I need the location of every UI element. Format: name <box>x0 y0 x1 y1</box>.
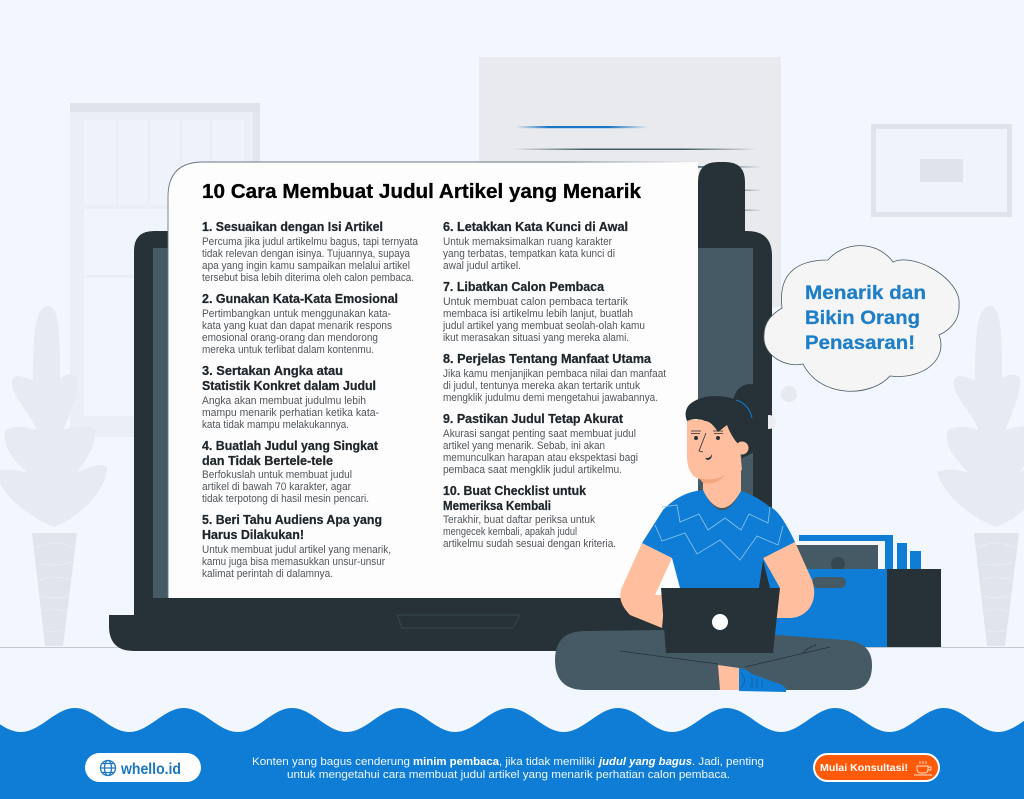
tip 9 <box>443 412 638 476</box>
tip 10: Memeriksa Kembali <box>443 499 551 513</box>
thought bubble dots <box>762 386 797 429</box>
ground line <box>0 647 1024 648</box>
tip 7: Untuk membuat calon pembaca tertarik <box>443 296 629 308</box>
tip 2 <box>202 292 398 356</box>
tip 6: Untuk memaksimalkan ruang karakter <box>443 236 612 248</box>
tip 7: 7. Libatkan Calon Pembaca <box>443 280 605 294</box>
tip 3 <box>202 364 379 431</box>
tip 8: mengklik judulmu demi mengetahui jawabannya. <box>443 392 658 404</box>
whello logo pill <box>85 753 201 782</box>
tip 8: di judul, tentunya mereka akan tertarik untuk <box>443 380 641 392</box>
icon: globe <box>100 760 116 776</box>
tip 3: mampu menarik perhatian ketika kata- <box>202 407 379 419</box>
open laptop <box>759 560 770 588</box>
tip 1: tersebut bisa lebih diterima oleh calon pembaca. <box>202 272 414 284</box>
foot and shoe <box>718 665 739 690</box>
tip 6: awal judul artikel. <box>443 260 521 272</box>
tip 6: yang terbatas, tempatkan kata kunci di <box>443 248 615 260</box>
thought cloud callout: Menarik dan <box>805 283 926 304</box>
hair <box>686 396 752 458</box>
tip 4 <box>202 439 379 505</box>
tip 1: apa yang ingin kamu sampaikan melalui artikel <box>202 260 410 272</box>
tip 3: kata tidak mampu melakukannya. <box>202 419 349 431</box>
tip 10: Terakhir, buat daftar periksa untuk <box>443 514 596 526</box>
consultation button: Mulai Konsultasi! <box>820 762 908 774</box>
background window <box>70 103 260 437</box>
tip 2: mereka untuk terlibat dalam kontenmu. <box>202 344 374 356</box>
tip 4: artikel di bawah 70 karakter, agar <box>202 481 351 493</box>
left plant <box>0 306 107 646</box>
face details <box>694 436 698 440</box>
tip 3: Angka akan membuat judulmu lebih <box>202 395 366 407</box>
tip 5: 5. Beri Tahu Audiens Apa yang <box>202 513 382 527</box>
tip 7: membaca isi artikelmu lebih lanjut, buatlah <box>443 308 633 320</box>
tip 10 <box>443 484 616 550</box>
face <box>687 418 742 481</box>
thought cloud callout: Bikin Orang <box>805 308 920 329</box>
consultation button <box>814 754 939 781</box>
right arm <box>763 542 814 618</box>
background framed picture <box>874 126 1010 214</box>
tip 4: Berfokuslah untuk membuat judul <box>202 469 352 481</box>
tip 7: ikut merasakan situasi yang mereka alami. <box>443 332 629 344</box>
right plant <box>937 306 1024 646</box>
footer message: . Jadi, penting <box>692 756 764 768</box>
tip 10: 10. Buat Checklist untuk <box>443 484 586 498</box>
tip 3: 3. Sertakan Angka atau <box>202 364 343 378</box>
tip 10: mengecek kembali, apakah judul <box>443 526 577 538</box>
thought cloud callout: Penasaran! <box>805 333 915 354</box>
tip 2: Pertimbangkan untuk menggunakan kata- <box>202 308 391 320</box>
tip 9: Akurasi sangat penting saat membuat judul <box>443 428 636 440</box>
tip 9: artikel yang menarik. Sebab, ini akan <box>443 440 605 452</box>
tip 5: Untuk membuat judul artikel yang menarik, <box>202 544 391 556</box>
tip 8: Jika kamu menjanjikan pembaca nilai dan manfaat <box>443 368 666 380</box>
tip 1: tidak relevan dengan isinya. Tujuannya, supaya <box>202 248 410 260</box>
footer message: minim pembaca <box>413 756 500 768</box>
tip 8: 8. Perjelas Tentang Manfaat Utama <box>443 352 652 366</box>
laptop body <box>109 162 772 651</box>
tip 2: 2. Gunakan Kata-Kata Emosional <box>202 292 398 306</box>
background document <box>479 57 781 307</box>
tip 5: kamu juga bisa memasukkan unsur-unsur <box>202 556 385 568</box>
shirt <box>642 490 795 588</box>
whello logo pill: whello.id <box>120 761 181 778</box>
tip 5: kalimat perintah di dalamnya. <box>202 568 333 580</box>
article panel <box>168 162 698 598</box>
tip 2: emosional orang-orang dan mendorong <box>202 332 378 344</box>
icon: coffee cup <box>914 761 932 775</box>
tip 1 <box>202 220 418 284</box>
tip 9: 9. Pastikan Judul Tetap Akurat <box>443 412 624 426</box>
wave footer band <box>0 708 1024 799</box>
left arm <box>620 543 672 628</box>
tip 4: 4. Buatlah Judul yang Singkat <box>202 439 379 453</box>
tip 6 <box>443 220 628 272</box>
tip 5: Harus Dilakukan! <box>202 528 304 542</box>
tip 2: kata yang kuat dan dapat menarik respons <box>202 320 392 332</box>
tip 9: pembaca saat mengklik judul artikelmu. <box>443 464 622 476</box>
tip 4: tidak terpotong di hasil mesin pencari. <box>202 493 369 505</box>
tip 5 <box>202 513 391 580</box>
tip 1: 1. Sesuaikan dengan Isi Artikel <box>202 220 383 234</box>
box with folders <box>770 535 941 647</box>
hair bun <box>733 384 768 458</box>
footer message: Konten yang bagus cenderung <box>252 756 410 768</box>
tip 7: judul artikel yang membuat seolah-olah kamu <box>442 320 645 332</box>
footer message: judul yang bagus <box>597 756 692 768</box>
tip 7 <box>442 280 645 344</box>
tip 10: artikelmu sudah sesuai dengan kriteria. <box>443 538 616 550</box>
neck <box>703 465 741 508</box>
footer message: untuk mengetahui cara membuat judul artikel yang menarik perhatian calon pembaca. <box>287 769 730 781</box>
tip 6: 6. Letakkan Kata Kunci di Awal <box>443 220 628 234</box>
tip 4: dan Tidak Bertele-tele <box>202 454 333 468</box>
title: 10 Cara Membuat Judul Artikel yang Menarik <box>202 180 642 203</box>
thought cloud callout <box>764 246 959 391</box>
legs <box>555 630 872 690</box>
footer message: , jika tidak memiliki <box>499 756 595 768</box>
tip 3: Statistik Konkret dalam Judul <box>202 379 376 393</box>
tip 9: memunculkan harapan atau ekspektasi bagi <box>443 452 638 464</box>
footer message <box>252 756 764 781</box>
tip 1: Percuma jika judul artikelmu bagus, tapi ternyata <box>202 236 418 248</box>
tip 8 <box>443 352 666 404</box>
person with laptop <box>555 384 872 692</box>
